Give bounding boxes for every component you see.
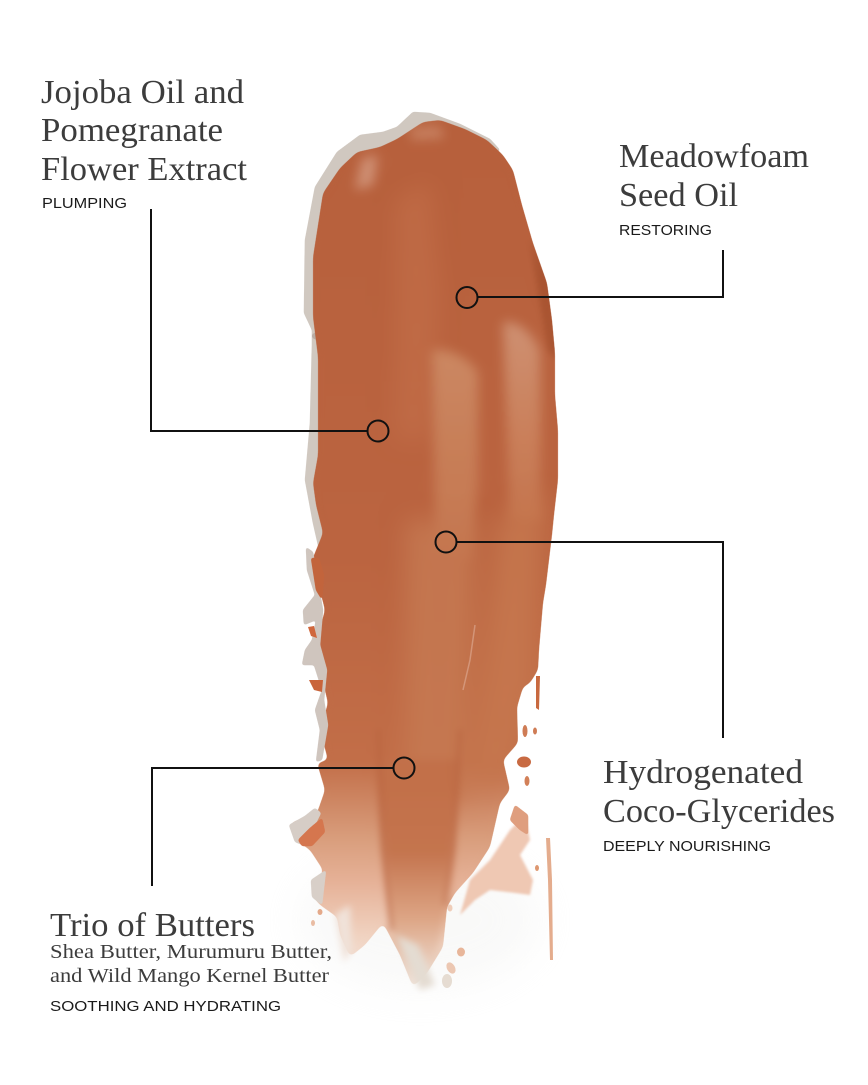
glint [463, 625, 475, 690]
right edge dark [532, 240, 556, 356]
callout: Meadowfoam Seed Oil [619, 138, 809, 239]
leader line: deeply nourishing [436, 532, 723, 738]
swatch: lip product smear [289, 112, 558, 990]
upper mid tone [414, 266, 418, 276]
benefit label: PLUMPING [42, 195, 127, 212]
highlight right [503, 322, 541, 520]
sub text: Shea Butter, Murumuru Butter, [50, 941, 332, 963]
swatch streaks and highlights [355, 126, 556, 990]
bottom droplets [311, 904, 465, 988]
right splatter [510, 676, 553, 960]
dark streak right [442, 825, 456, 906]
heading: Hydrogenated [603, 754, 803, 791]
highlight right lower [488, 520, 542, 794]
callout: Hydrogenated Coco-Glycerides [603, 754, 835, 855]
dark streak left [380, 815, 396, 932]
leader line: soothing and hydrating [152, 758, 414, 886]
swatch body [290, 120, 558, 990]
heading: Trio of Butters [50, 907, 255, 944]
top centre highlight [410, 126, 445, 140]
callout: Trio of Butters: and Wild Mango Kernel Butter [50, 965, 329, 987]
callout: Hydrogenated Coco-Glycerides: Coco-Glycerides [603, 793, 835, 830]
central light band [405, 520, 476, 756]
leader line: plumping [151, 209, 388, 442]
swatch soft shadow [300, 850, 540, 990]
flake at notch [312, 332, 326, 340]
callout: Meadowfoam Seed Oil: Seed Oil [619, 177, 738, 214]
benefit label: RESTORING [619, 222, 712, 239]
callout: Jojoba Oil and Pomegranate Flower Extract [41, 74, 248, 212]
callout: Jojoba Oil and Pomegranate Flower Extract: Flower Extract [41, 151, 248, 188]
leader line: restoring [456, 250, 723, 308]
callout: Jojoba Oil and Pomegranate Flower Extract: Pomegranate [41, 112, 223, 149]
top highlight [355, 155, 378, 190]
benefit label: DEEPLY NOURISHING [603, 838, 771, 855]
callout: Trio of Butters [50, 907, 332, 1015]
swatch grey translucent rim [304, 112, 500, 567]
central wedge [379, 766, 458, 984]
lower pale wash [335, 815, 533, 990]
heading: Jojoba Oil and [41, 74, 244, 111]
heading: Meadowfoam [619, 138, 809, 175]
benefit label: SOOTHING AND HYDRATING [50, 998, 281, 1015]
highlight centre [432, 350, 478, 560]
left flaking edge [289, 547, 328, 905]
